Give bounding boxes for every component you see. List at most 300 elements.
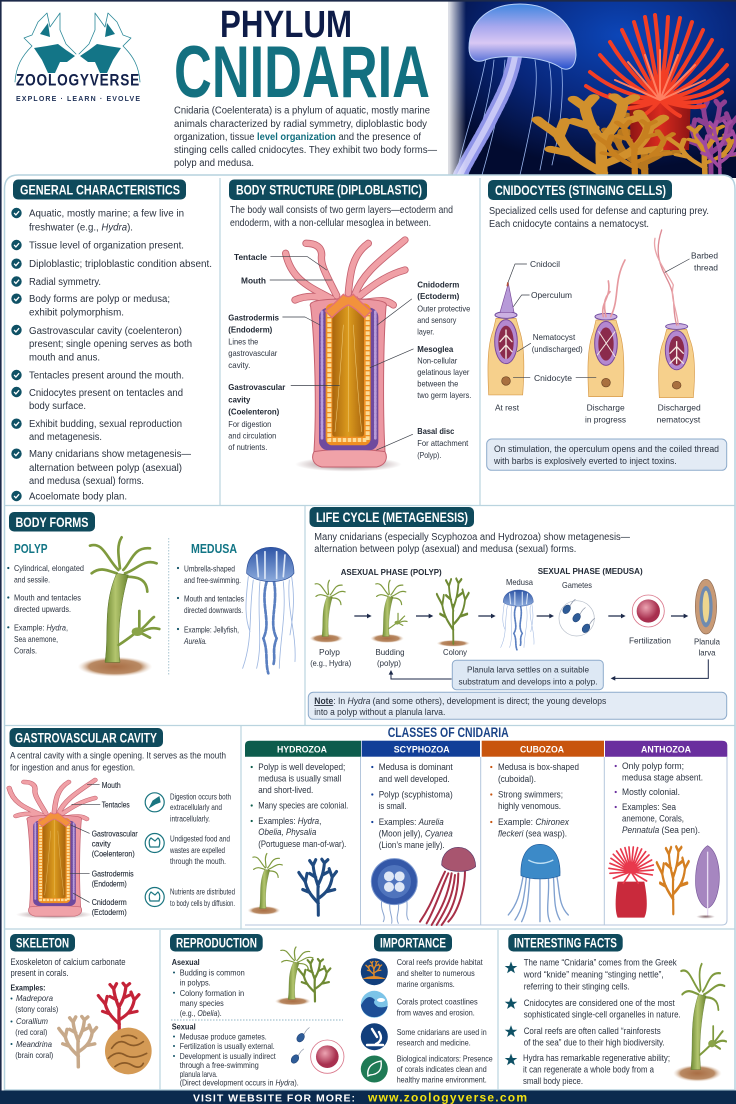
labels: left of diagram: For digestion <box>228 419 272 429</box>
reproduction: asexual <box>172 957 245 1018</box>
medusa text <box>177 564 244 646</box>
icon: polyp illustration <box>78 537 159 677</box>
labels: right of diagram: Basal disc <box>417 426 455 436</box>
labels: left of diagram: Lines the <box>228 336 259 346</box>
class: scyphozoa: Examples: Aurelia <box>379 817 444 827</box>
intro paragraph: animals characterized by radial symmetry, diploblastic body <box>174 119 427 130</box>
stage: colony <box>437 579 470 647</box>
skeleton text: Madrepora <box>16 993 53 1003</box>
polyp text: directed upwards. <box>14 604 71 614</box>
icon: hero jellyfish <box>456 4 576 175</box>
digestion facts text: Nutrients are distributed <box>170 888 235 896</box>
stage labels: Budding <box>376 647 405 657</box>
class: anthozoa: ANTHOZOA <box>641 744 691 756</box>
heading: classes of cnidaria: CLASSES OF CNIDARIA <box>388 725 509 740</box>
characteristics list: freshwater (e.g., Hydra). <box>29 222 133 234</box>
subheading: polyp: POLYP <box>14 541 48 556</box>
characteristics list: present; single opening serves as both <box>29 339 192 350</box>
phase headings <box>341 566 643 577</box>
polyp text: Corals. <box>14 646 37 656</box>
facts text: it can regenerate a whole body from a <box>523 1064 654 1074</box>
callout: note on Hydra: Note: In Hydra (and some others), development is direct; the young develops <box>314 696 607 706</box>
facts text: of the sea” due to their high biodiversity. <box>524 1038 665 1048</box>
panel: interesting facts <box>505 934 726 1086</box>
skeleton text: present in corals. <box>10 968 68 978</box>
importance text: Some cnidarians are used in <box>397 1027 487 1037</box>
body structure intro <box>230 205 453 229</box>
class: scyphozoa: and well developed. <box>379 774 450 784</box>
facts text: Hydra has remarkable regenerative ability; <box>523 1053 670 1063</box>
class table frame <box>245 757 727 925</box>
reproduction: sexual: through a free-swimming <box>180 1060 259 1070</box>
labels: right of diagram: Non-cellular <box>417 356 457 366</box>
medusa text: Mouth and tentacles <box>184 594 244 604</box>
title: CNIDARIA <box>174 32 430 113</box>
characteristics list: body surface. <box>29 401 86 412</box>
heading: body forms <box>9 512 95 532</box>
heading: body structure <box>229 180 427 200</box>
panel: reproduction <box>170 934 344 1088</box>
labels: right of diagram <box>417 280 471 460</box>
panel: importance <box>361 934 493 1084</box>
callout: planula settling: substratum and develops into a polyp. <box>458 676 598 686</box>
labels: cnidocyte parts: (undischarged) <box>532 344 583 354</box>
class: cubozoa: (cuboidal). <box>498 774 536 784</box>
skeleton text: Meandrina <box>16 1039 52 1049</box>
illustration: hydra with colony <box>275 947 330 1005</box>
labels: cnidocyte parts: Operculum <box>531 290 572 300</box>
characteristics list: Acoelomate body plan. <box>29 492 127 502</box>
class: scyphozoa: (Lion’s mane jelly). <box>379 840 445 850</box>
labels: cnidocyte parts: At rest <box>495 402 520 412</box>
cell discharging <box>588 260 625 397</box>
reproduction: asexual: Budding is common <box>180 968 245 978</box>
reproduction: sexual: Development is usually indirect <box>180 1051 276 1061</box>
stage labels: Medusa <box>506 577 533 587</box>
class: hydrozoa: Obelia, Physalia <box>258 827 316 837</box>
callout: stimulation <box>487 439 727 470</box>
importance text <box>397 957 493 1084</box>
labels: left of diagram: and circulation <box>228 430 277 440</box>
reproduction: asexual: (e.g., Obelia). <box>180 1008 222 1018</box>
stage labels: Gametes <box>562 580 592 590</box>
title <box>174 4 430 113</box>
skeleton text: (red coral) <box>15 1027 47 1037</box>
divider <box>168 538 170 675</box>
characteristics list: Tissue level of organization present. <box>29 240 184 252</box>
class: scyphozoa: SCYPHOZOA <box>394 744 450 756</box>
labels: cnidocyte parts: Barbed <box>691 250 718 260</box>
stage: planula larva <box>695 579 717 634</box>
facts text: sophisticated single-cell organelles in nature. <box>524 1010 681 1020</box>
digestion facts text: Digestion occurs both <box>170 792 231 802</box>
stage labels: Colony <box>443 647 468 657</box>
labels: right of diagram: Outer protective <box>417 304 471 314</box>
digestion facts text <box>169 792 235 908</box>
facts text: Coral reefs are often called “rainforests <box>524 1026 661 1036</box>
class: anthozoa: Examples: Sea <box>622 802 676 812</box>
labels: gastrovascular parts <box>92 781 138 917</box>
polyp text: Sea anemone, <box>14 634 58 644</box>
panel: body forms <box>7 512 295 677</box>
labels: gastrovascular parts: Tentacles <box>102 800 130 810</box>
labels: left of diagram: cavity <box>228 394 251 404</box>
stage labels <box>310 577 720 668</box>
characteristics list: and metagenesis. <box>29 432 102 443</box>
polyp text: Mouth and tentacles <box>14 592 81 602</box>
star icons <box>505 962 517 1065</box>
characteristics list: Diploblastic; triploblastic condition absent. <box>29 259 212 270</box>
characteristics list: Exhibit budding, sexual reproduction <box>29 419 182 430</box>
divider <box>171 1019 343 1021</box>
labels: right of diagram: and sensory <box>417 315 457 325</box>
reproduction: sexual: Medusae produce gametes. <box>180 1032 267 1042</box>
icon: medusa illustration <box>243 547 295 673</box>
heading: general characteristics: GENERAL CHARACTERISTICS <box>20 182 180 198</box>
logo: Zoologyverse <box>15 13 140 103</box>
digestion facts text: through the mouth. <box>170 857 226 866</box>
stage: gametes <box>559 599 595 636</box>
cnidocytes intro <box>489 206 709 230</box>
illustration: hydra <box>673 964 726 1082</box>
labels: right of diagram: For attachment <box>417 438 469 448</box>
logo name: ZOOLOGYVERSE <box>16 70 140 90</box>
reproduction: sexual: Fertilization is usually external. <box>180 1041 275 1051</box>
stage: polyp <box>310 580 345 643</box>
importance text: Biological indicators: Presence <box>397 1054 493 1064</box>
stage: budding <box>370 580 407 643</box>
stage labels: (e.g., Hydra) <box>310 658 351 668</box>
logo tagline: EXPLORE · LEARN · EVOLVE <box>16 96 140 103</box>
skeleton text: Corallium <box>16 1016 48 1026</box>
heading: general characteristics <box>13 180 186 200</box>
gastrovascular intro: A central cavity with a single opening. It serves as the mouth <box>10 750 226 762</box>
digestion facts text: to body cells by diffusion. <box>170 899 235 908</box>
life cycle intro: Many cnidarians (especially Scyphozoa and Hydrozoa) show metagenesis— <box>314 532 630 543</box>
reproduction: sexual: Sexual <box>172 1022 196 1032</box>
heading: gastrovascular cavity <box>10 728 163 747</box>
leader lines <box>508 259 689 377</box>
icon: leaf <box>361 1056 388 1082</box>
polyp text: and sessile. <box>14 574 50 584</box>
reproduction: asexual: in polyps. <box>180 978 211 988</box>
heading: life cycle: LIFE CYCLE (METAGENESIS) <box>316 510 468 525</box>
labels: cnidocyte parts <box>495 250 718 424</box>
labels: right of diagram: (Ectoderm) <box>417 291 459 301</box>
facts text: small body piece. <box>523 1076 583 1086</box>
digestion facts text: Undigested food and <box>170 834 230 844</box>
heading: life cycle <box>310 507 474 527</box>
heading: interesting facts: INTERESTING FACTS <box>514 936 617 950</box>
importance text: Corals protect coastlines <box>397 996 478 1006</box>
class: hydrozoa: medusa is usually small <box>258 774 341 784</box>
body structure intro: endoderm, with a non-cellular mesoglea in between. <box>230 218 431 229</box>
medusa text: Umbrella-shaped <box>184 564 235 574</box>
phase headings: SEXUAL PHASE (MEDUSA) <box>538 566 643 576</box>
labels: left of diagram: cavity. <box>228 360 250 370</box>
importance text: Coral reefs provide habitat <box>397 957 483 967</box>
labels: cnidocyte parts: thread <box>694 262 718 272</box>
importance text: research and medicine. <box>397 1038 471 1048</box>
class: hydrozoa: (Portuguese man-of-war). <box>258 839 346 849</box>
labels: cnidocyte parts: nematocyst <box>657 414 701 424</box>
labels: left of diagram: Tentacle <box>234 252 267 262</box>
footer bar <box>0 1090 736 1104</box>
icon: coral habitat <box>361 958 388 985</box>
title: PHYLUM <box>220 4 352 46</box>
class: cubozoa: fleckeri (sea wasp). <box>498 828 567 838</box>
facts text: word “knide” meaning “stinging nettle”, <box>523 970 664 980</box>
class: cubozoa: Example: Chironex <box>498 817 569 827</box>
reproduction: asexual: many species <box>180 998 224 1008</box>
class: anthozoa: Mostly colonial. <box>622 787 680 797</box>
intro paragraph: organization, tissue level organization and the presence of <box>174 132 421 143</box>
heading: body forms: BODY FORMS <box>16 515 88 530</box>
diagram: gastrovascular section <box>9 780 100 919</box>
life cycle intro: alternation between polyp (asexual) and medusa (sexual) forms. <box>314 544 576 555</box>
labels: cnidocyte parts: Discharge <box>587 402 625 412</box>
facts text <box>523 958 681 1086</box>
stage: medusa <box>501 590 534 650</box>
class: scyphozoa: Medusa is dominant <box>379 762 453 772</box>
reproduction: sexual: (Direct development occurs in Hydra). <box>180 1078 299 1088</box>
labels: cnidocyte parts: in progress <box>585 414 626 424</box>
class: anthozoa: Pennatula (Sea pen). <box>622 825 700 835</box>
life cycle intro <box>314 532 630 555</box>
labels: gastrovascular parts: Mouth <box>102 781 121 790</box>
importance text: and shelter to numerous <box>397 968 475 978</box>
labels: left of diagram <box>228 252 286 452</box>
skeleton text: (brain coral) <box>15 1050 53 1060</box>
skeleton text: Exoskeleton of calcium carbonate <box>10 957 126 967</box>
labels: cnidocyte parts: Cnidocil <box>530 259 560 269</box>
digestion facts text: wastes are expelled <box>169 846 225 855</box>
characteristics list: Radial symmetry. <box>29 277 101 288</box>
heading: body structure: BODY STRUCTURE (DIPLOBLASTIC) <box>236 182 422 198</box>
panel: skeleton <box>10 934 152 1074</box>
gastrovascular intro <box>10 750 226 774</box>
labels: right of diagram: layer. <box>417 326 434 336</box>
icon: twin wolf heads <box>15 13 140 82</box>
class: hydrozoa: Polyp is well developed; <box>258 762 345 772</box>
heading: cnidocytes <box>488 180 672 200</box>
characteristics list: alternation between polyp (asexual) <box>29 463 182 474</box>
icons: digestion facts <box>145 793 164 906</box>
characteristics list <box>29 208 212 502</box>
heading: skeleton: SKELETON <box>16 936 69 950</box>
hero image: jellyfish and coral reef <box>436 0 736 193</box>
class: cubozoa: Medusa is box-shaped <box>498 762 579 772</box>
labels: left of diagram: Mouth <box>241 276 266 286</box>
class: hydrozoa <box>245 741 361 915</box>
skeleton text <box>10 957 126 1060</box>
digestion facts text: intracellularly. <box>170 814 210 824</box>
illustration: anemone, coral, sea pen <box>609 846 719 919</box>
panel: body structure <box>228 180 471 472</box>
labels: right of diagram: gelatinous layer <box>417 367 469 377</box>
reproduction: asexual: Colony formation in <box>180 988 245 998</box>
class: cubozoa: Strong swimmers; <box>498 790 563 800</box>
heading: reproduction: REPRODUCTION <box>176 936 257 950</box>
icon: hero red anemone <box>586 15 728 150</box>
life cycle diagram <box>310 579 717 681</box>
labels: right of diagram: (Polyp). <box>417 450 441 460</box>
illustration: three corals <box>59 983 152 1074</box>
polyp text <box>7 563 84 656</box>
labels: left of diagram: (Endoderm) <box>228 324 272 334</box>
labels: gastrovascular parts: Gastrovascular <box>92 830 138 838</box>
characteristics list: Gastrovascular cavity (coelenteron) <box>29 326 182 337</box>
characteristics list: Body forms are polyp or medusa; <box>29 294 170 305</box>
medusa text: directed downwards. <box>184 605 243 615</box>
intro paragraph: stinging cells called cnidocytes. They exhibit two body forms— <box>174 145 437 156</box>
skeleton text: (stony corals) <box>15 1004 58 1014</box>
labels: gastrovascular parts: Gastrodermis <box>92 870 134 878</box>
labels: right of diagram: two germ layers. <box>417 390 471 400</box>
characteristics list: exhibit polymorphism. <box>29 308 124 318</box>
illustration: box jellyfish <box>508 844 568 922</box>
labels: left of diagram: of nutrients. <box>228 442 267 452</box>
panel: cnidocytes <box>487 180 727 470</box>
labels: gastrovascular parts: (Ectoderm) <box>92 908 127 917</box>
labels: left of diagram: gastrovascular <box>228 348 277 358</box>
stage: fertilization <box>632 595 664 627</box>
class: scyphozoa: is small. <box>379 801 407 811</box>
intro paragraph: polyp and medusa. <box>174 158 254 169</box>
class: cubozoa: CUBOZOA <box>520 744 564 756</box>
icon: microscope <box>361 1023 388 1050</box>
labels: right of diagram: Mesoglea <box>417 344 454 354</box>
reproduction: sexual <box>172 1022 299 1088</box>
labels: gastrovascular parts: (Endoderm) <box>92 880 127 888</box>
heading: importance <box>374 934 452 952</box>
class: scyphozoa: (Moon jelly), Cyanea <box>379 828 453 838</box>
heading: skeleton <box>10 934 75 952</box>
check icons <box>11 208 22 501</box>
class: hydrozoa: and short-lived. <box>258 785 313 795</box>
heading: importance: IMPORTANCE <box>380 936 446 950</box>
importance text: from waves and erosion. <box>397 1008 475 1018</box>
cell discharged <box>655 230 695 398</box>
phase headings: ASEXUAL PHASE (POLYP) <box>341 567 442 577</box>
skeleton text: Examples: <box>10 982 46 992</box>
class: scyphozoa <box>362 741 480 925</box>
digestion facts text: extracellularly and <box>170 803 222 812</box>
polyp text: Cylindrical, elongated <box>14 563 84 573</box>
class: anthozoa: anemone, Corals, <box>622 814 684 824</box>
medusa text: Example: Jellyfish, <box>184 624 239 634</box>
heading: reproduction <box>170 934 263 952</box>
heading: cnidocytes: CNIDOCYTES (STINGING CELLS) <box>495 183 666 198</box>
illustration: moon jelly and lion's mane <box>371 847 476 925</box>
importance text: healthy marine environment. <box>397 1074 487 1084</box>
labels: cnidocyte parts: Discharged <box>658 402 701 412</box>
class: anthozoa: Only polyp form; <box>622 761 684 771</box>
icon: hero back coral <box>604 101 736 184</box>
intro paragraph <box>174 106 437 169</box>
callout: stimulation: On stimulation, the operculum opens and the coiled thread <box>494 444 719 454</box>
arrows <box>354 614 708 681</box>
heading: interesting facts <box>508 934 623 952</box>
medusa text: Aurelia. <box>183 636 207 646</box>
subheading: medusa: MEDUSA <box>191 541 237 556</box>
labels: right of diagram: between the <box>417 378 459 388</box>
characteristics list: and medusa (sexual) forms. <box>29 476 144 487</box>
diagram: polyp longitudinal section <box>270 240 413 472</box>
reproduction: asexual: Asexual <box>172 957 200 967</box>
characteristics list: mouth and anus. <box>29 352 100 364</box>
callout: planula settling <box>452 660 603 690</box>
importance text: of corals indicates clean and <box>397 1064 487 1074</box>
stage labels: (polyp) <box>377 658 401 668</box>
characteristics list: Aquatic, mostly marine; a few live in <box>29 208 184 220</box>
class: hydrozoa: HYDROZOA <box>277 744 327 756</box>
callout: note on Hydra: into a polyp without a planula larva. <box>314 707 445 717</box>
panel: general characteristics <box>11 180 212 502</box>
characteristics list: Cnidocytes present on tentacles and <box>29 388 183 399</box>
labels: cnidocyte parts: Nematocyst <box>533 332 576 342</box>
medusa text: and free-swimming. <box>184 575 241 585</box>
facts text: Cnidocytes are considered one of the most <box>524 998 675 1008</box>
class: hydrozoa: Examples: Hydra, <box>258 816 321 826</box>
stage labels: larva <box>698 648 716 658</box>
labels: right of diagram: Cnidoderm <box>417 280 459 290</box>
labels: left of diagram: Gastrovascular <box>228 382 286 392</box>
labels: left of diagram: Gastrodermis <box>228 312 279 322</box>
panel: life cycle <box>308 507 727 719</box>
characteristics list: Many cnidarians show metagenesis— <box>29 449 191 460</box>
callout: planula settling: Planula larva settles on a suitable <box>467 664 589 674</box>
labels: gastrovascular parts: cavity <box>92 840 111 848</box>
intro paragraph: Cnidaria (Coelenterata) is a phylum of aquatic, mostly marine <box>174 106 430 116</box>
callout: note on Hydra <box>308 692 727 719</box>
polyp text: Example: Hydra, <box>14 622 68 632</box>
panel: classes of cnidaria <box>245 725 727 925</box>
class: cubozoa: highly venomous. <box>498 801 561 811</box>
stage labels: Fertilization <box>629 636 671 646</box>
diagram: three cnidocyte stages <box>488 230 695 398</box>
labels: cnidocyte parts: Cnidocyte <box>534 373 572 383</box>
class: anthozoa: medusa stage absent. <box>622 772 703 782</box>
importance text: marine organisms. <box>397 979 455 989</box>
class: anthozoa <box>605 741 727 919</box>
labels: gastrovascular parts: (Coelenteron) <box>92 850 135 858</box>
stage labels: Planula <box>694 636 720 646</box>
characteristics list: Tentacles present around the mouth. <box>29 370 184 382</box>
icon: coastline waves <box>361 991 388 1018</box>
illustration: gametes and egg <box>290 1028 344 1073</box>
cnidocytes intro: Specialized cells used for defense and capturing prey. <box>489 206 709 217</box>
class: hydrozoa: Many species are colonial. <box>258 800 348 810</box>
icon: hero front coral <box>537 97 736 193</box>
gastrovascular intro: for ingestion and anus for egestion. <box>10 762 135 774</box>
stage labels: Polyp <box>319 647 340 657</box>
heading: gastrovascular cavity: GASTROVASCULAR CAVITY <box>15 730 157 746</box>
reproduction: sexual: planula larva. <box>180 1069 218 1079</box>
facts text: The name “Cnidaria” comes from the Greek <box>524 958 677 968</box>
illustration: hydra and hydrozoan colony <box>248 854 337 915</box>
cnidocytes intro: Each cnidocyte contains a nematocyst. <box>489 219 649 230</box>
facts text: referring to their stinging cells. <box>524 982 630 992</box>
labels: left of diagram: (Coelenteron) <box>228 406 279 416</box>
labels: gastrovascular parts: Cnidoderm <box>92 898 127 907</box>
class: scyphozoa: Polyp (scyphistoma) <box>379 790 453 800</box>
panel: gastrovascular cavity <box>9 728 235 919</box>
body structure intro: The body wall consists of two germ layers—ectoderm and <box>230 205 453 216</box>
cell at rest <box>488 282 524 395</box>
class: cubozoa <box>482 741 604 922</box>
callout: stimulation: with barbs is explosively everted to inject toxins. <box>493 456 677 466</box>
